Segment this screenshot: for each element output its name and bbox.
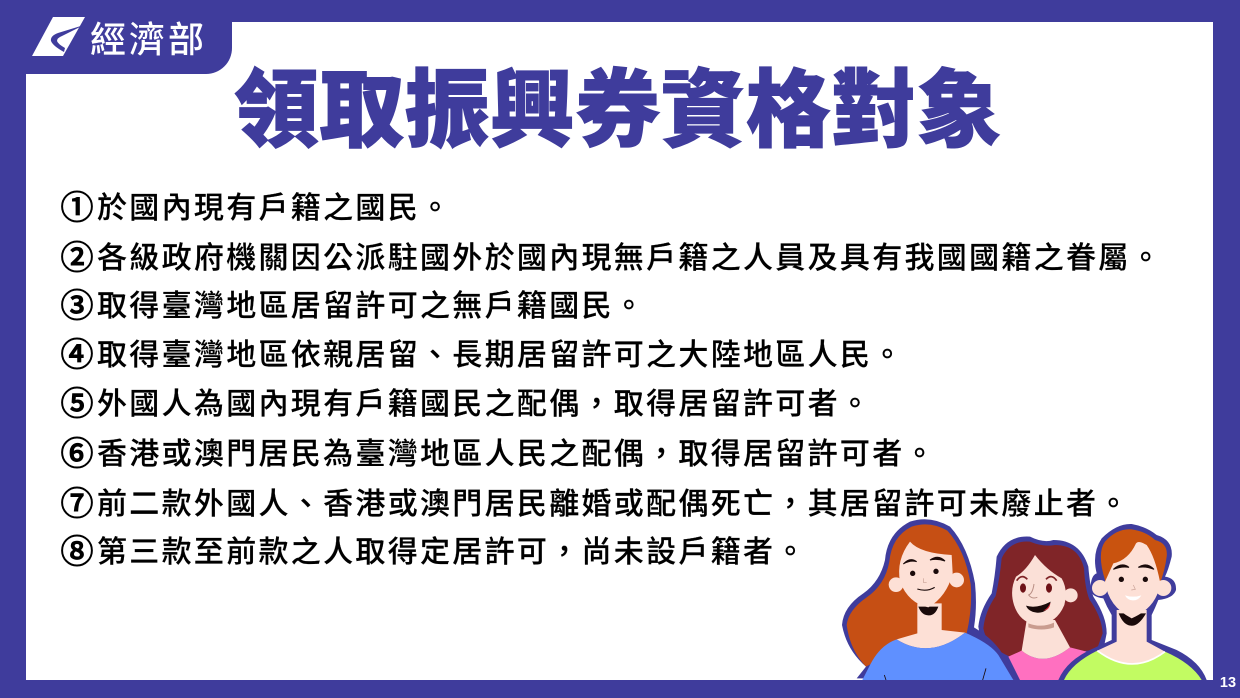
text: ⑧ <box>60 525 94 573</box>
text: 取得臺灣地區依親居留、長期居留許可之大陸地區人民。 <box>97 330 904 374</box>
list item 7 <box>60 477 1131 525</box>
text: 各級政府機關因公派駐國外於國內現無戶籍之人員及具有我國國籍之眷屬。 <box>97 233 1163 277</box>
ministry logo tab <box>0 0 232 74</box>
text: 外國人為國內現有戶籍國民之配偶，取得居留許可者。 <box>97 379 872 423</box>
text: 取得臺灣地區居留許可之無戶籍國民。 <box>97 281 646 325</box>
text: ⑦ <box>60 477 94 525</box>
list item 2 <box>60 231 1163 279</box>
person: left woman <box>842 519 1018 680</box>
list item 6 <box>60 427 937 475</box>
text: ⑥ <box>60 427 94 475</box>
page number: 13 <box>1220 675 1236 691</box>
text: 香港或澳門居民為臺灣地區人民之配偶，取得居留許可者。 <box>97 429 937 473</box>
text: ④ <box>60 328 94 376</box>
person: middle woman <box>978 537 1107 680</box>
list item 8 <box>60 525 808 573</box>
text: ③ <box>60 279 94 327</box>
text: 第三款至前款之人取得定居許可，尚未設戶籍者。 <box>97 527 808 571</box>
illustration: three people <box>842 519 1207 680</box>
title: 領取振興券資格對象 <box>234 42 1002 165</box>
text: ⑤ <box>60 377 94 425</box>
list item 3 <box>60 279 646 327</box>
text: ① <box>60 181 94 229</box>
list item 5 <box>60 377 872 425</box>
list item 4 <box>60 328 904 376</box>
person: right man <box>1058 524 1207 680</box>
brand name: 經濟部 <box>90 11 207 63</box>
icon: ministry logo <box>32 17 85 56</box>
text: ② <box>60 231 94 279</box>
text: 前二款外國人、香港或澳門居民離婚或配偶死亡，其居留許可未廢止者。 <box>97 479 1131 523</box>
text: 於國內現有戶籍之國民。 <box>97 183 452 227</box>
list item 1 <box>60 181 452 229</box>
